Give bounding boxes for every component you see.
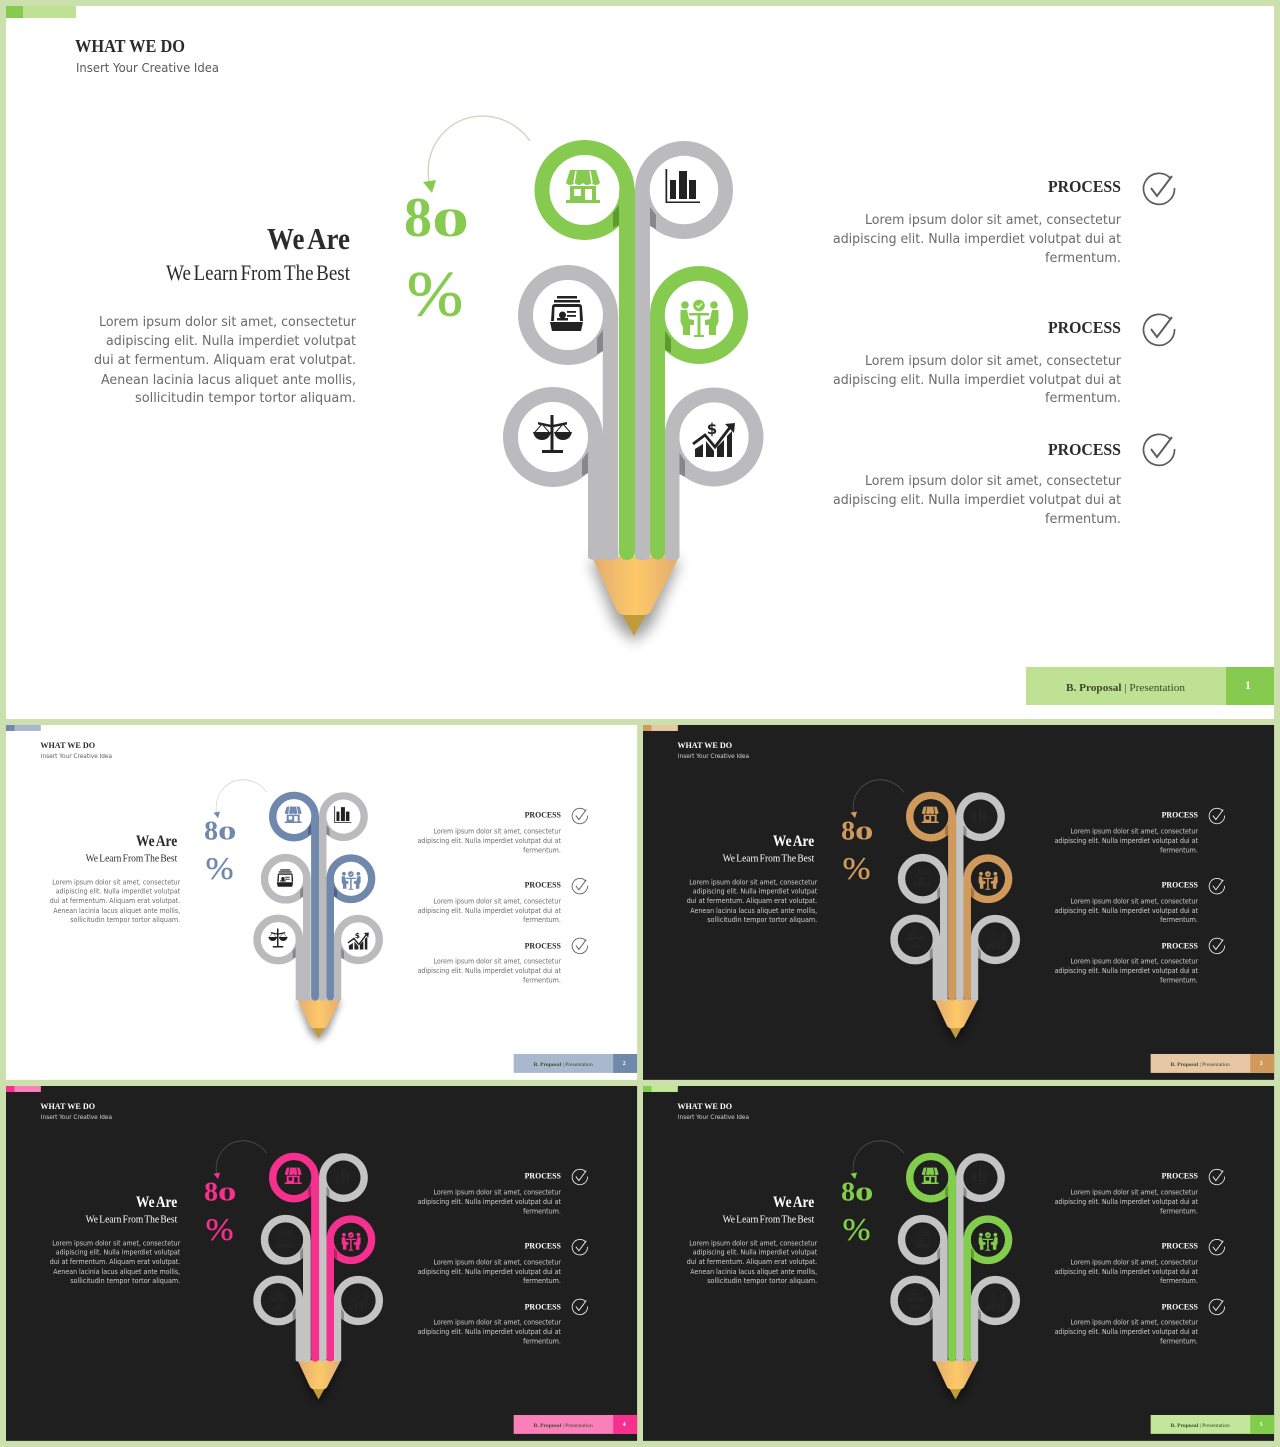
left text block: sollicitudin tempor tortor aliquam.: [707, 916, 817, 924]
right items: adipiscing elit. Nulla imperdiet volutpat dui at: [418, 967, 561, 975]
left text block: Aenean lacinia lacus aliquet ante mollis,: [690, 1268, 817, 1276]
curved arrow: [851, 780, 904, 818]
left text block: [50, 878, 181, 924]
right item 2: [833, 314, 1175, 406]
left heading: We Learn From The Best: [166, 260, 350, 285]
left text block: Aenean lacinia lacus aliquet ante mollis,: [690, 907, 817, 915]
right items: PROCESS: [525, 1241, 561, 1251]
percentage 80 %: %: [206, 851, 233, 886]
right item 3: PROCESS: [1048, 440, 1121, 459]
left text block: Aenean lacinia lacus aliquet ante mollis,: [53, 1268, 180, 1276]
slide background: [6, 1086, 637, 1441]
title: Insert Your Creative Idea: [678, 1114, 749, 1121]
right item 2: Lorem ipsum dolor sit amet, consectetur: [865, 353, 1121, 369]
icon: store: [566, 170, 600, 203]
title: [75, 36, 219, 75]
slide background: [6, 725, 637, 1080]
right items: adipiscing elit. Nulla imperdiet volutpat dui at: [418, 837, 561, 845]
right item 3: adipiscing elit. Nulla imperdiet volutpat dui at: [833, 492, 1121, 508]
right items: Lorem ipsum dolor sit amet, consectetur: [1071, 898, 1198, 906]
curved arrow: [214, 780, 267, 818]
left text block: sollicitudin tempor tortor aliquam.: [707, 1277, 817, 1285]
right items: PROCESS: [525, 1301, 561, 1311]
footer bar: B. Proposal | Presentation: [534, 1423, 593, 1429]
ring: middle left: [526, 272, 618, 560]
icon: growth chart: $: [707, 420, 717, 438]
left text block: dui at fermentum. Aliquam erat volutpat.: [94, 352, 356, 368]
right items: adipiscing elit. Nulla imperdiet volutpat dui at: [1055, 1328, 1198, 1336]
left heading: We Are: [136, 833, 177, 850]
left text block: Aenean lacinia lacus aliquet ante mollis,: [101, 372, 356, 388]
footer bar: [514, 1415, 637, 1434]
title: Insert Your Creative Idea: [678, 753, 749, 760]
right items: Lorem ipsum dolor sit amet, consectetur: [1071, 957, 1198, 965]
right items: adipiscing elit. Nulla imperdiet volutpat dui at: [1055, 967, 1198, 975]
right items: fermentum.: [1160, 1277, 1198, 1285]
left text block: adipiscing elit. Nulla imperdiet volutpat: [56, 1249, 181, 1257]
pencil tree diagram: [894, 1156, 1016, 1403]
right item 1: adipiscing elit. Nulla imperdiet volutpat dui at: [833, 231, 1121, 247]
right items: PROCESS: [1162, 1241, 1198, 1251]
left heading: We Learn From The Best: [723, 852, 814, 864]
title: Insert Your Creative Idea: [76, 60, 219, 75]
slide background: [643, 725, 1274, 1080]
left text block: adipiscing elit. Nulla imperdiet volutpat: [106, 333, 356, 349]
left text block: sollicitudin tempor tortor aliquam.: [70, 1277, 180, 1285]
icon: file box: [550, 296, 583, 331]
percentage 80 %: 80: [841, 1176, 874, 1207]
right items: adipiscing elit. Nulla imperdiet volutpat dui at: [418, 907, 561, 915]
left text block: dui at fermentum. Aliquam erat volutpat.: [50, 897, 180, 905]
percentage 80 %: [841, 1176, 874, 1247]
right items: fermentum.: [523, 976, 561, 984]
right items: PROCESS: [525, 880, 561, 890]
title: [40, 740, 112, 760]
pencil tree diagram: [257, 795, 379, 1042]
right item 3: fermentum.: [1045, 511, 1121, 527]
percentage 80 %: [841, 815, 874, 886]
percentage 80 %: [204, 815, 237, 886]
percentage 80 %: %: [407, 259, 463, 329]
slide 2: blue light slide: [6, 725, 637, 1080]
slide 3: tan dark slide: [643, 725, 1274, 1080]
right items: Lorem ipsum dolor sit amet, consectetur: [434, 1188, 561, 1196]
left text block: adipiscing elit. Nulla imperdiet volutpat: [56, 888, 181, 896]
right items: adipiscing elit. Nulla imperdiet volutpat dui at: [418, 1198, 561, 1206]
percentage 80 %: %: [843, 851, 870, 886]
right items: adipiscing elit. Nulla imperdiet volutpat dui at: [1055, 907, 1198, 915]
right items: [1055, 1169, 1225, 1345]
curved arrow: [851, 1141, 904, 1179]
percentage 80 %: [204, 1176, 237, 1247]
title: [677, 740, 749, 760]
right items: adipiscing elit. Nulla imperdiet volutpat dui at: [1055, 837, 1198, 845]
right items: Lorem ipsum dolor sit amet, consectetur: [1071, 827, 1198, 835]
right items: Lorem ipsum dolor sit amet, consectetur: [434, 827, 561, 835]
icon: balance scale: [533, 415, 572, 453]
right items: fermentum.: [1160, 846, 1198, 854]
icon: bar chart: [666, 169, 700, 203]
pencil tree diagram: [257, 1156, 379, 1403]
footer bar: 5: [1260, 1422, 1263, 1428]
right items: fermentum.: [1160, 1337, 1198, 1345]
left text block: [50, 1239, 181, 1285]
right items: PROCESS: [525, 810, 561, 820]
left heading: [166, 221, 350, 285]
pencil tip: [590, 557, 680, 642]
left heading: We Are: [773, 833, 814, 850]
left heading: We Learn From The Best: [86, 1213, 177, 1225]
left text block: Lorem ipsum dolor sit amet, consectetur: [689, 1239, 817, 1247]
right items: fermentum.: [523, 1207, 561, 1215]
left text block: sollicitudin tempor tortor aliquam.: [135, 390, 356, 406]
top tab: [643, 1086, 678, 1092]
curved arrow: [423, 116, 530, 193]
right items: Lorem ipsum dolor sit amet, consectetur: [1071, 1259, 1198, 1267]
right items: fermentum.: [1160, 976, 1198, 984]
top tab: [643, 725, 678, 731]
left text block: Lorem ipsum dolor sit amet, consectetur: [99, 314, 356, 330]
left text block: [94, 314, 356, 406]
footer bar: 1: [1245, 680, 1251, 692]
left heading: [86, 833, 177, 864]
right items: Lorem ipsum dolor sit amet, consectetur: [1071, 1318, 1198, 1326]
right items: fermentum.: [523, 1337, 561, 1345]
right items: PROCESS: [525, 940, 561, 950]
left text block: adipiscing elit. Nulla imperdiet volutpat: [693, 888, 818, 896]
left heading: We Are: [267, 221, 350, 256]
right item 1: PROCESS: [1048, 177, 1121, 196]
pencil tree diagram: [894, 795, 1016, 1042]
left text block: adipiscing elit. Nulla imperdiet volutpat: [693, 1249, 818, 1257]
right items: adipiscing elit. Nulla imperdiet volutpat dui at: [418, 1328, 561, 1336]
right items: fermentum.: [1160, 1207, 1198, 1215]
left text block: Lorem ipsum dolor sit amet, consectetur: [689, 878, 817, 886]
right items: fermentum.: [1160, 916, 1198, 924]
top tab: [6, 725, 41, 731]
footer bar: [1026, 667, 1274, 705]
right items: PROCESS: [1162, 880, 1198, 890]
left heading: We Learn From The Best: [86, 852, 177, 864]
right items: [418, 808, 588, 984]
percentage 80 %: 80: [404, 187, 469, 249]
ring: top left accent: [542, 148, 627, 552]
title: WHAT WE DO: [40, 1101, 95, 1111]
right items: PROCESS: [1162, 1301, 1198, 1311]
right items: [418, 1169, 588, 1345]
left heading: [723, 833, 814, 864]
left text block: [687, 878, 818, 924]
pencil tree diagram: [510, 148, 756, 642]
right items: Lorem ipsum dolor sit amet, consectetur: [434, 898, 561, 906]
left text block: Lorem ipsum dolor sit amet, consectetur: [52, 878, 180, 886]
left heading: [723, 1194, 814, 1225]
right item 1: Lorem ipsum dolor sit amet, consectetur: [865, 212, 1121, 228]
ring: bottom right: [664, 395, 756, 560]
footer bar: B. Proposal | Presentation: [1171, 1062, 1230, 1068]
footer bar: 3: [1260, 1061, 1263, 1067]
right items: PROCESS: [1162, 1171, 1198, 1181]
left text block: dui at fermentum. Aliquam erat volutpat.: [687, 1258, 817, 1266]
right item 2: PROCESS: [1048, 318, 1121, 337]
right items: fermentum.: [523, 916, 561, 924]
left text block: dui at fermentum. Aliquam erat volutpat.: [687, 897, 817, 905]
right item 1: fermentum.: [1045, 250, 1121, 266]
right items: Lorem ipsum dolor sit amet, consectetur: [434, 1318, 561, 1326]
left heading: [86, 1194, 177, 1225]
right items: [1055, 808, 1225, 984]
right items: adipiscing elit. Nulla imperdiet volutpat dui at: [1055, 1198, 1198, 1206]
footer bar: [1151, 1415, 1274, 1434]
slide background: [6, 6, 1274, 719]
footer bar: [1151, 1054, 1274, 1073]
title: WHAT WE DO: [677, 740, 732, 750]
icon: growth chart: [693, 420, 735, 457]
title: Insert Your Creative Idea: [41, 753, 112, 760]
slide 4: pink dark slide: [6, 1086, 637, 1441]
right items: Lorem ipsum dolor sit amet, consectetur: [434, 957, 561, 965]
left heading: We Are: [136, 1194, 177, 1211]
slide background: [643, 1086, 1274, 1441]
percentage 80 %: %: [843, 1212, 870, 1247]
percentage 80 %: 80: [204, 815, 237, 846]
right items: PROCESS: [1162, 940, 1198, 950]
right item 2: fermentum.: [1045, 390, 1121, 406]
right items: adipiscing elit. Nulla imperdiet volutpat dui at: [1055, 1268, 1198, 1276]
footer bar: B. Proposal | Presentation: [1171, 1423, 1230, 1429]
footer bar: B. Proposal | Presentation: [534, 1062, 593, 1068]
left text block: Aenean lacinia lacus aliquet ante mollis,: [53, 907, 180, 915]
left text block: Lorem ipsum dolor sit amet, consectetur: [52, 1239, 180, 1247]
right items: Lorem ipsum dolor sit amet, consectetur: [1071, 1188, 1198, 1196]
title: WHAT WE DO: [677, 1101, 732, 1111]
left text block: [687, 1239, 818, 1285]
slide 1: main green light slide: [6, 6, 1274, 719]
right item 1: [833, 173, 1175, 266]
right items: Lorem ipsum dolor sit amet, consectetur: [434, 1259, 561, 1267]
footer bar: [514, 1054, 637, 1073]
icon: meeting: [680, 300, 718, 337]
footer bar: 2: [623, 1061, 626, 1067]
percentage 80 %: 80: [204, 1176, 237, 1207]
footer bar: 4: [623, 1422, 626, 1428]
left text block: dui at fermentum. Aliquam erat volutpat.: [50, 1258, 180, 1266]
curved arrow: [214, 1141, 267, 1179]
right items: PROCESS: [525, 1171, 561, 1181]
left heading: We Learn From The Best: [723, 1213, 814, 1225]
slide 5: green dark slide: [643, 1086, 1274, 1441]
right item 3: Lorem ipsum dolor sit amet, consectetur: [865, 473, 1121, 489]
percentage 80 %: [404, 187, 469, 329]
ring: bottom left: [510, 394, 603, 560]
title: Insert Your Creative Idea: [41, 1114, 112, 1121]
right items: fermentum.: [523, 1277, 561, 1285]
ring: top right: [635, 148, 726, 560]
title: WHAT WE DO: [75, 36, 185, 56]
right item 2: adipiscing elit. Nulla imperdiet volutpat dui at: [833, 372, 1121, 388]
title: [677, 1101, 749, 1121]
left heading: We Are: [773, 1194, 814, 1211]
title: WHAT WE DO: [40, 740, 95, 750]
right items: fermentum.: [523, 846, 561, 854]
top tab: [6, 6, 76, 18]
title: [40, 1101, 112, 1121]
right items: adipiscing elit. Nulla imperdiet volutpat dui at: [418, 1268, 561, 1276]
right items: PROCESS: [1162, 810, 1198, 820]
top tab: [6, 1086, 41, 1092]
left text block: sollicitudin tempor tortor aliquam.: [70, 916, 180, 924]
ring: middle right accent: [658, 274, 740, 552]
percentage 80 %: 80: [841, 815, 874, 846]
footer bar: B. Proposal | Presentation: [1066, 683, 1186, 694]
right item 3: [833, 434, 1175, 527]
percentage 80 %: %: [206, 1212, 233, 1247]
